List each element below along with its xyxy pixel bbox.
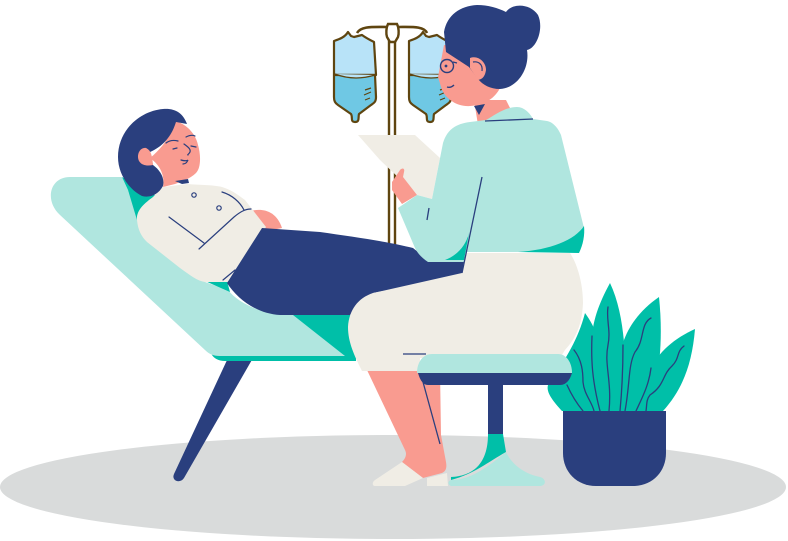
patient hair <box>118 109 187 197</box>
stool <box>417 354 572 486</box>
ground shadow <box>0 435 786 539</box>
doctor skirt <box>348 253 583 371</box>
doctor hair <box>444 5 540 89</box>
recliner chair <box>51 177 356 361</box>
doctor leg <box>367 370 446 478</box>
patient facial features <box>166 135 196 164</box>
plant pot <box>563 411 666 486</box>
doctor glasses and smile <box>440 60 457 87</box>
doctor collar mark <box>474 104 485 115</box>
IV bag right <box>409 32 451 122</box>
patient hand <box>250 210 282 232</box>
leaf veins <box>567 307 684 411</box>
chair leg <box>173 358 253 481</box>
plant leaves <box>548 283 695 411</box>
doctor ear <box>470 57 486 80</box>
patient neck bow <box>175 179 189 184</box>
doctor hand <box>392 169 417 204</box>
doctor coat <box>398 107 584 262</box>
patient ear <box>138 148 153 166</box>
blouse buttons and folds <box>169 192 251 280</box>
patient trousers <box>227 228 466 315</box>
doctor face <box>438 45 500 106</box>
coat lines <box>427 119 533 273</box>
doctor shoes <box>373 462 423 486</box>
coat hem shadow <box>518 226 584 253</box>
doctor <box>348 5 584 486</box>
IV bag left <box>334 32 376 122</box>
patient face <box>150 121 200 187</box>
doctor neck <box>474 100 511 125</box>
IV pole <box>357 24 427 245</box>
paper sheet <box>358 135 440 199</box>
patient <box>118 109 282 282</box>
stool base <box>451 434 506 480</box>
patient blouse <box>137 184 266 282</box>
